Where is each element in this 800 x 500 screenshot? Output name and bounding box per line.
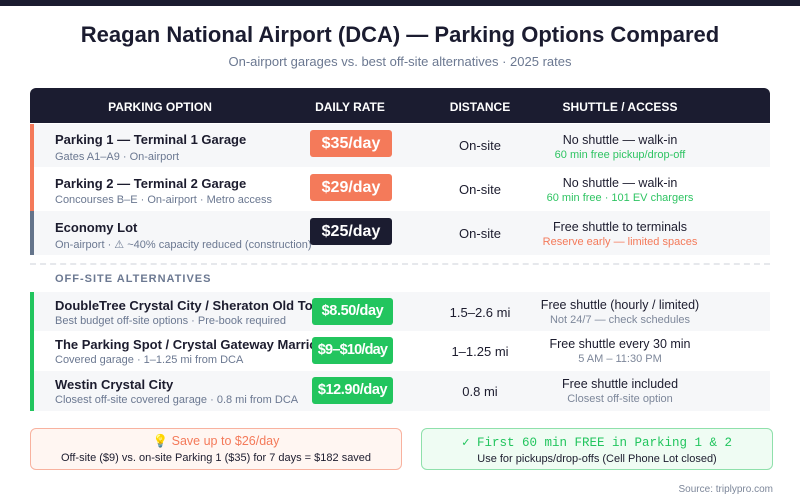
row: Westin: Closest off-site covered garage · 0.8 mi from DCA [55, 394, 298, 406]
row: Parking 1: $35/day [322, 135, 380, 152]
row: DoubleTree: $8.50/day [322, 303, 383, 319]
row: Parking 1: Parking 1 — Terminal 1 Garage [55, 132, 246, 147]
callout: free 60 min: ✓ First 60 min FREE in Parking 1 & 2 [462, 436, 732, 450]
table header: SHUTTLE / ACCESS [563, 100, 677, 114]
table header: DAILY RATE [315, 100, 385, 114]
row: Economy Lot: On-airport · ⚠ ~40% capacity reduced (construction) [55, 239, 312, 251]
row: Parking Spot: 5 AM – 11:30 PM [578, 353, 662, 365]
row: Westin: Free shuttle included [562, 377, 678, 391]
source: Source: triplypro.com [679, 484, 773, 495]
row: DoubleTree [30, 292, 770, 331]
row: Economy Lot: Free shuttle to terminals [553, 220, 687, 234]
row: Parking 1: On-site [459, 138, 501, 153]
row: Parking Spot: $9–$10/day [318, 342, 387, 358]
callout: savings [30, 428, 402, 470]
row: Economy Lot: On-site [459, 226, 501, 241]
row: Economy Lot: $25/day [322, 223, 380, 240]
title: Reagan National Airport (DCA) — Parking Options Compared [81, 22, 719, 47]
row: Parking Spot: Free shuttle every 30 min [549, 337, 691, 351]
row: Westin: Closest off-site option [567, 393, 673, 405]
row: Parking 2: On-site [459, 182, 501, 197]
row: Parking Spot: 1–1.25 mi [451, 344, 509, 359]
row: Parking 2: No shuttle — walk-in [563, 176, 677, 190]
table header: PARKING OPTION [108, 100, 212, 114]
row: Parking 2: Parking 2 — Terminal 2 Garage [55, 176, 246, 191]
row: Economy Lot [30, 211, 770, 255]
row: Parking 2: $29/day [322, 179, 380, 196]
row: Economy Lot: Economy Lot [55, 220, 137, 235]
top strip [0, 0, 800, 6]
row: Parking Spot: Covered garage · 1–1.25 mi from DCA [55, 354, 243, 366]
row: DoubleTree: Not 24/7 — check schedules [550, 314, 690, 326]
row: DoubleTree: Free shuttle (hourly / limited) [541, 298, 699, 312]
callout: free 60 min [421, 428, 773, 470]
callout: free 60 min: Use for pickups/drop-offs (Cell Phone Lot closed) [477, 453, 717, 465]
table header [30, 88, 770, 123]
row: Westin: $12.90/day [318, 382, 387, 398]
callout: savings: 💡 Save up to $26/day [153, 434, 279, 448]
row: Westin: Westin Crystal City [55, 377, 173, 392]
subtitle: On-airport garages vs. best off-site alternatives · 2025 rates [228, 54, 571, 69]
row: Parking Spot [30, 331, 770, 371]
section label: off-site: OFF-SITE ALTERNATIVES [55, 273, 211, 285]
row: Parking 1 [30, 124, 770, 167]
row: Parking 2: Concourses B–E · On-airport · Metro access [55, 194, 272, 206]
row: DoubleTree: DoubleTree Crystal City / Sheraton Old Town [55, 298, 331, 313]
row: Westin: 0.8 mi [462, 384, 498, 399]
row: Parking 1: 60 min free pickup/drop-off [555, 149, 685, 161]
row: DoubleTree: 1.5–2.6 mi [450, 305, 510, 320]
row: DoubleTree: Best budget off-site options · Pre-book required [55, 315, 286, 327]
row: Parking 2 [30, 167, 770, 211]
table header: DISTANCE [450, 100, 510, 114]
callout: savings: Off-site ($9) vs. on-site Parking 1 ($35) for 7 days = $182 saved [61, 452, 371, 464]
row: Economy Lot: Reserve early — limited spaces [543, 236, 697, 248]
row: Westin [30, 371, 770, 411]
row: Parking 2: 60 min free · 101 EV chargers [547, 192, 693, 204]
row: Parking 1: Gates A1–A9 · On-airport [55, 151, 179, 163]
row: Parking Spot: The Parking Spot / Crystal Gateway Marriott [55, 337, 326, 352]
row: Parking 1: No shuttle — walk-in [563, 133, 677, 147]
